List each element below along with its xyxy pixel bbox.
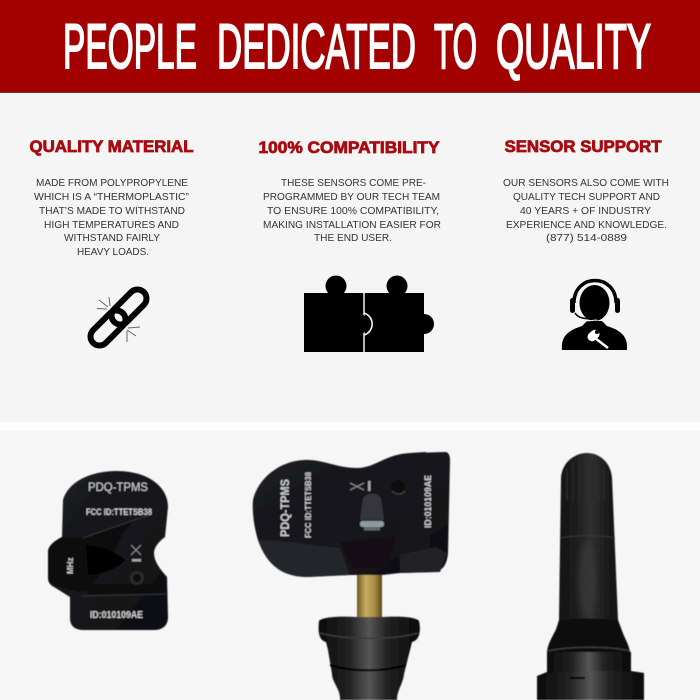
heading: quality material: QUALITY MATERIAL: [30, 137, 194, 156]
text: sensor support description: [503, 177, 669, 244]
text: sensor support description: EXPERIENCE AND KNOWLEDGE.: [506, 219, 667, 231]
photo: sensor front view: FCC ID:TTETSB38: [86, 507, 152, 518]
text: compatibility description: THESE SENSORS COME PRE-: [281, 177, 426, 189]
text: sensor support description: OUR SENSORS ALSO COME WITH: [503, 177, 669, 189]
text: quality material description: MADE FROM POLYPROPYLENE: [36, 177, 188, 189]
text: sensor support description: 40 YEARS + OF INDUSTRY: [520, 205, 651, 217]
text: quality material description: THAT’S MADE TO WITHSTAND: [39, 205, 185, 217]
text: compatibility description: TO ENSURE 100% COMPATIBILITY,: [267, 205, 439, 217]
text: sensor support description: (877) 514-0889: [546, 232, 627, 244]
text: compatibility description: MAKING INSTALLATION EASIER FOR: [263, 219, 441, 231]
column: quality material: [30, 137, 194, 349]
text: compatibility description: [263, 177, 441, 244]
text: compatibility description: PROGRAMMED BY OUR TECH TEAM: [263, 191, 440, 203]
photo: sensor front view: MHz: [66, 558, 75, 574]
title banner: [0, 0, 700, 93]
photo: sensor front view: ID:010109AE: [90, 610, 143, 621]
rubber valve base: [319, 617, 420, 700]
text: quality material description: [34, 177, 189, 258]
text: quality material description: WHICH IS A “THERMOPLASTIC”: [34, 191, 189, 203]
photo: sensor side view with brass stem: ID:010109AE: [423, 475, 433, 528]
text: sensor support description: QUALITY TECH SUPPORT AND: [513, 191, 660, 203]
sensor label text: PDQ-TPMS: [88, 480, 148, 494]
heading: 100% compatibility: 100% COMPATIBILITY: [258, 138, 440, 157]
column: sensor support: [503, 137, 669, 350]
text: compatibility description: THE END USER.: [314, 232, 392, 244]
icon: support agent with headset: [562, 280, 627, 350]
sensor wing detail: [48, 520, 134, 592]
title: PEOPLE: [63, 12, 197, 82]
column: 100% compatibility: [258, 138, 441, 352]
photo: sensor side view with brass stem: [253, 452, 450, 700]
white divider band: [0, 422, 700, 431]
lower photo panel background: [0, 431, 700, 700]
title: DEDICATED: [217, 12, 416, 82]
upper panel background: [0, 93, 700, 422]
icon: chain link: [87, 286, 150, 349]
photo: sensor side view with brass stem: FCC ID:TTETSB38: [303, 472, 313, 538]
icon: puzzle pieces: [304, 276, 434, 352]
photo: rubber valve stem: [537, 453, 644, 700]
title: [63, 12, 651, 82]
title: TO: [434, 12, 477, 82]
valve cap ribs: [567, 458, 604, 502]
text: quality material description: HIGH TEMPERATURES AND: [44, 219, 179, 231]
text: quality material description: HEAVY LOADS.: [77, 246, 149, 258]
heading: sensor support: SENSOR SUPPORT: [504, 137, 662, 156]
text: quality material description: WITHSTAND FAIRLY: [64, 232, 160, 244]
photo: sensor front view: [48, 471, 168, 630]
sensor side label text: PDQ-TPMS: [280, 479, 292, 537]
